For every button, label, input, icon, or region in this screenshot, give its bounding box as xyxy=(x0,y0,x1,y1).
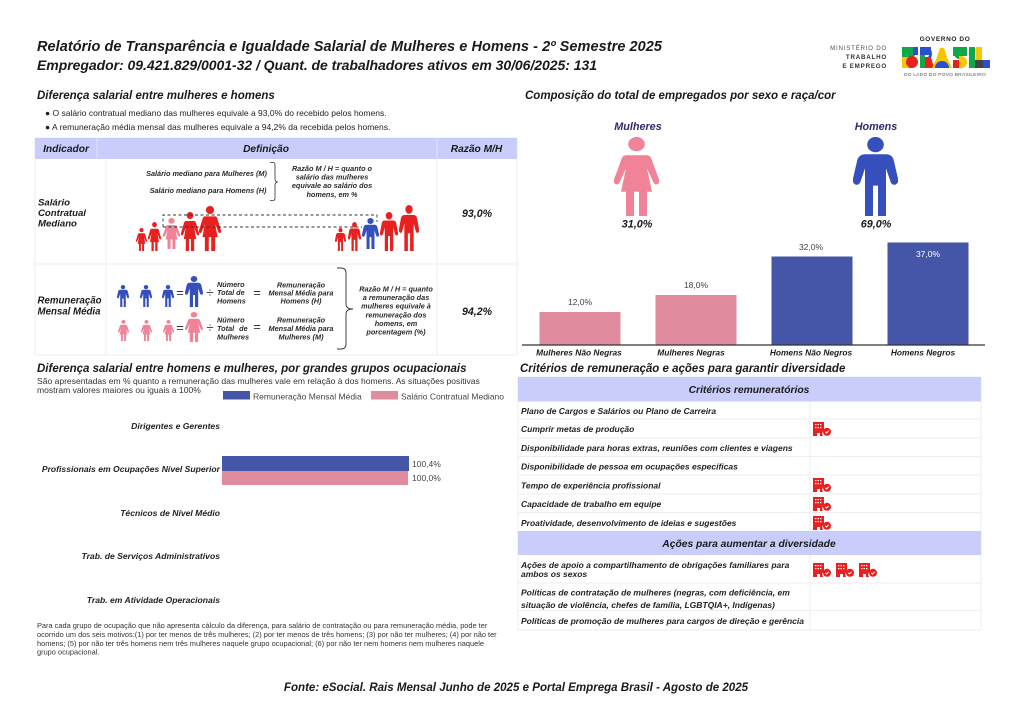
definition: salário mediano: salário das mulheres xyxy=(296,172,368,182)
value: 94,2%: 94,2% xyxy=(462,306,493,318)
bar chart: grupos ocupacionais: 100,0% xyxy=(412,473,441,483)
logo: Governo do Brasil: I xyxy=(969,43,975,75)
logo: Governo do Brasil: B xyxy=(902,43,917,75)
text block: nota de rodapé: ocorrido um dos seis motivos:(1) por ter menos de três mulheres; (2) por ter menos de três homens; (3) por não ter mulheres; (4) por não ter xyxy=(37,630,497,639)
bar chart: grupos ocupacionais: Dirigentes e Gerentes xyxy=(131,421,220,431)
value: 93,0%: 93,0% xyxy=(462,208,493,220)
formula: homens: Mensal Média para xyxy=(269,288,333,298)
panel: tabela de indicadores xyxy=(35,138,517,355)
formula: homens xyxy=(117,276,333,307)
formula: mulheres xyxy=(118,312,333,342)
footer: fonte: Fonte: eSocial. Rais Mensal Junho de 2025 e Portal Emprega Brasil - Agosto de 2025 xyxy=(284,682,749,694)
criteria list: Cumprir metas de produção xyxy=(521,424,634,434)
criteria list: Tempo de experiência profissional xyxy=(521,480,661,490)
bar chart: sexo e raça/cor: Homens Não Negros xyxy=(770,348,853,358)
pictogram: homens xyxy=(335,205,419,251)
bar chart: sexo e raça/cor: 18,0% xyxy=(684,280,708,290)
brace and ratio definition: remuneração dos xyxy=(366,310,426,320)
row label: remuneração mensal média: Mensal Média xyxy=(38,306,101,318)
definition: salário mediano xyxy=(146,162,373,200)
row label: remuneração mensal média: Remuneração xyxy=(38,296,102,306)
logo: Governo do Brasil xyxy=(902,36,990,78)
formula: homens: Remuneração xyxy=(277,280,326,290)
logo: Ministério do Trabalho e Emprego: TRABALHO xyxy=(846,54,887,61)
formula: mulheres: ÷ xyxy=(206,320,214,335)
actions list: Políticas de contratação de mulheres (negras, com deficiência, em xyxy=(521,588,790,598)
title: Relatório de Transparência e Igualdade Salarial de Mulheres e Homens - 2º Semestre 2025 xyxy=(37,39,663,55)
panel: critérios remuneratórios e ações xyxy=(518,377,981,630)
icon: mulheres 31,0%: 31,0% xyxy=(622,218,653,230)
logo: Ministério do Trabalho e Emprego xyxy=(830,45,887,70)
header: ações para aumentar a diversidade: Ações para aumentar a diversidade xyxy=(661,539,836,550)
title: Empregador: 09.421.829/0001-32 / Quant. de trabalhadores ativos em 30/06/2025: 131 xyxy=(37,57,597,73)
formula: homens: Homens xyxy=(217,296,246,306)
bar chart: sexo e raça/cor: Mulheres Negras xyxy=(657,348,725,358)
formula: homens: Número xyxy=(217,280,245,289)
bar chart: grupos ocupacionais: 100,4% xyxy=(412,459,441,469)
logo: Governo do Brasil: GOVERNO DO xyxy=(920,36,970,43)
text block: explicação: São apresentadas em % quanto a remuneração das mulheres vale em relação à dos homens. As situações positivas xyxy=(37,376,480,386)
row label: salário contratual mediano: Contratual xyxy=(38,208,86,219)
formula: mulheres: Mulheres (M) xyxy=(278,332,324,342)
bar chart: sexo e raça/cor: 32,0% xyxy=(799,242,823,252)
actions list: situação de violência, chefes de família, LGBTQIA+, Indígenas) xyxy=(521,600,775,610)
criteria list xyxy=(521,406,793,528)
brace and ratio definition: porcentagem (%) xyxy=(365,328,426,336)
bar chart: grupos ocupacionais: Técnicos de Nível Médio xyxy=(120,508,220,518)
actions list: ambos os sexos xyxy=(521,569,587,579)
definition: salário mediano: equivale ao salário dos xyxy=(292,181,372,190)
icon: mulheres 31,0%: Mulheres xyxy=(614,121,662,133)
header: ações para aumentar a diversidade xyxy=(518,531,981,555)
criteria list: Proatividade, desenvolvimento de ideias e sugestões xyxy=(521,518,737,528)
bar chart: grupos ocupacionais: Profissionais em Ocupações Nível Superior xyxy=(42,464,221,474)
definition: salário mediano: homens, em % xyxy=(306,190,358,199)
table header: Razão M/H xyxy=(451,144,503,155)
icon: homens 69,0% xyxy=(853,121,898,230)
criteria list: Plano de Cargos e Salários ou Plano de Carreira xyxy=(521,406,716,416)
bar chart: grupos ocupacionais xyxy=(42,421,441,605)
text block: nota de rodapé: Para cada grupo de ocupação que não apresenta cálculo da diferença, para salário de contratação ou para remuneração média, pode ter xyxy=(37,621,488,630)
heading: critérios: Critérios de remuneração e ações para garantir diversidade xyxy=(520,363,846,375)
pictogram: mulheres xyxy=(136,206,221,251)
icon: homens 69,0%: 69,0% xyxy=(861,218,892,230)
legend: Salário Contratual Mediano xyxy=(401,392,504,402)
icon: mulheres 31,0% xyxy=(614,121,662,230)
legend: Remuneração Mensal Média xyxy=(253,392,362,402)
actions list xyxy=(520,560,804,626)
brace and ratio definition xyxy=(337,268,433,349)
bar chart: sexo e raça/cor xyxy=(522,242,985,358)
legend xyxy=(223,391,504,402)
logo: Governo do Brasil: L xyxy=(976,43,990,75)
formula: mulheres: Mulheres xyxy=(217,332,249,342)
definition: salário mediano: Salário mediano para Mulheres (M) xyxy=(146,169,267,178)
brace and ratio definition: Razão M / H = quanto xyxy=(359,284,433,294)
text block: resumo: ● A remuneração média mensal das mulheres equivale a 94,2% da recebida pelos homens. xyxy=(45,122,390,132)
text block: explicação xyxy=(37,376,480,395)
text block: nota de rodapé xyxy=(37,621,497,656)
row label: remuneração mensal média xyxy=(38,296,102,318)
formula: mulheres: = xyxy=(253,319,261,334)
formula: homens: = xyxy=(253,285,261,300)
formula: homens: Homens (H) xyxy=(281,296,322,306)
formula: mulheres: Remuneração xyxy=(277,316,326,324)
bar chart: sexo e raça/cor: 12,0% xyxy=(568,297,592,307)
logo: Ministério do Trabalho e Emprego: MINISTÉRIO DO xyxy=(830,45,887,52)
table header: Definição xyxy=(243,144,289,155)
icon: empresa marcada em critérios xyxy=(813,422,831,530)
header: critérios remuneratórios: Critérios remuneratórios xyxy=(689,385,810,396)
icon: homens 69,0%: Homens xyxy=(855,121,897,133)
definition: salário mediano: Salário mediano para Homens (H) xyxy=(150,186,267,195)
bar chart: grupos ocupacionais: Trab. de Serviços Administrativos xyxy=(81,551,220,561)
title xyxy=(37,39,663,73)
formula: mulheres: Número xyxy=(217,316,245,324)
formula: homens: ÷ xyxy=(206,285,214,300)
formula: homens: = xyxy=(176,285,184,300)
criteria list: Disponibilidade de pessoa em ocupações específicas xyxy=(521,462,738,472)
brace and ratio definition: mulheres equivale à xyxy=(361,302,431,310)
bar chart: grupos ocupacionais: Trab. em Atividade Operacionais xyxy=(87,595,220,605)
text block: nota de rodapé: grupo ocupacional. xyxy=(37,648,99,656)
row label: salário contratual mediano: Mediano xyxy=(38,218,77,230)
header: critérios remuneratórios xyxy=(518,377,981,402)
row label: salário contratual mediano: Salário xyxy=(38,198,70,208)
icon: empresas marcadas em ações xyxy=(813,563,877,577)
text block: resumo: ● O salário contratual mediano das mulheres equivale a 93,0% do recebido pelos homens. xyxy=(45,108,387,118)
logo: Governo do Brasil: A xyxy=(933,43,951,75)
brace and ratio definition: a remuneração das xyxy=(363,293,429,302)
definition: salário mediano: Razão M / H = quanto o xyxy=(292,164,373,173)
logo: Governo do Brasil: S xyxy=(953,43,967,75)
row label: salário contratual mediano xyxy=(38,198,86,230)
criteria list: Capacidade de trabalho em equipe xyxy=(521,499,662,509)
logo: Governo do Brasil: R xyxy=(919,43,933,75)
formula: homens: Total de xyxy=(217,288,245,297)
text block: explicação: mostram valores maiores ou iguais a 100% xyxy=(37,385,201,395)
actions list: Ações de apoio a compartilhamento de obrigações familiares para xyxy=(520,560,790,570)
bar chart: sexo e raça/cor: 37,0% xyxy=(916,249,940,259)
bar chart: sexo e raça/cor: Homens Negros xyxy=(891,348,955,358)
logo: Ministério do Trabalho e Emprego: E EMPREGO xyxy=(842,63,887,70)
brace and ratio definition: homens, em xyxy=(375,319,418,328)
formula: mulheres: = xyxy=(176,320,184,335)
text block: nota de rodapé: homens; (5) por não ter três homens nem três mulheres naquele grupo ocupacional; (6) por não ter nem homens nem mulheres naquele xyxy=(37,639,484,648)
table header: Indicador xyxy=(43,144,90,155)
formula: mulheres: Mensal Média para xyxy=(269,324,333,333)
criteria list: Disponibilidade para horas extras, reuniões com clientes e viagens xyxy=(521,443,793,453)
heading: diferença por grupos ocupacionais: Diferença salarial entre homens e mulheres, por grandes grupos ocupacionais xyxy=(37,363,466,375)
table header xyxy=(35,138,517,159)
actions list: Políticas de promoção de mulheres para cargos de direção e gerência xyxy=(521,616,804,626)
bar chart: sexo e raça/cor: Mulheres Não Negras xyxy=(536,348,622,358)
text block: resumo xyxy=(45,108,390,132)
heading: diferença salarial: Diferença salarial entre mulheres e homens xyxy=(37,90,275,102)
formula: mulheres: Total de xyxy=(217,324,248,333)
logo: Governo do Brasil: DO LADO DO POVO BRASILEIRO xyxy=(904,72,986,78)
heading: composição: Composição do total de empregados por sexo e raça/cor xyxy=(525,90,836,102)
